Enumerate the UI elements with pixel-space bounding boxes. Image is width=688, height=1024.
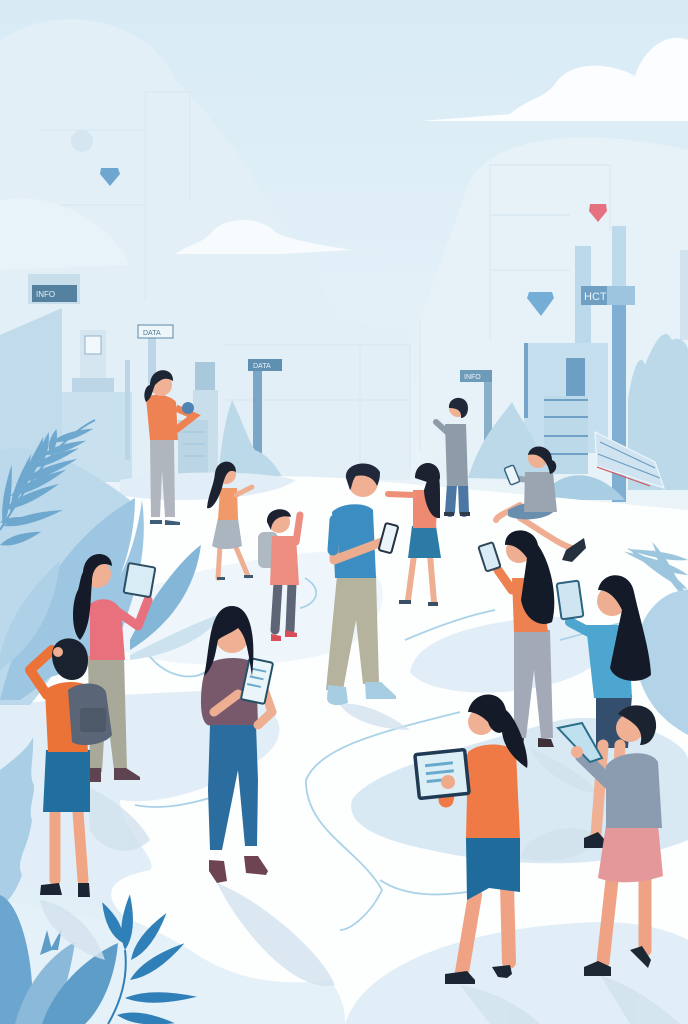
hazy background shapes — [0, 19, 688, 480]
left skyline: INFO — [36, 290, 55, 299]
ground pools — [0, 472, 688, 1024]
cloud: top right — [420, 38, 688, 121]
wire pile right — [595, 432, 664, 488]
lower left leaves — [0, 737, 34, 905]
person: woman in pink top with tablet — [73, 554, 155, 782]
faint circuit lines — [40, 92, 610, 470]
person shadows — [40, 704, 680, 1024]
sign posts: INFO — [464, 374, 481, 381]
person: boy seen from back — [436, 398, 470, 516]
sign posts: DATA — [253, 363, 271, 370]
person: woman in blue top with long hair — [557, 575, 651, 848]
left skyline — [0, 274, 173, 482]
person: boy with ponytail in orange shirt — [415, 694, 527, 984]
person: girl in teal skirt — [388, 463, 441, 606]
left skyline: DATA — [143, 330, 161, 337]
person: woman with ponytail, back left — [144, 370, 194, 525]
ground — [0, 476, 688, 1024]
mid bushes — [218, 400, 625, 500]
left palm — [0, 420, 95, 549]
cloud: middle — [175, 220, 352, 254]
person: child with backpack — [258, 509, 300, 641]
person: seated woman — [496, 446, 586, 562]
person: girl in grey skirt — [207, 462, 253, 580]
person: woman with pink skirt — [558, 705, 663, 976]
icon: gems — [71, 130, 607, 316]
left foliage mass — [0, 448, 225, 705]
far-right foliage — [628, 334, 688, 490]
background sky — [0, 0, 688, 520]
person: man in blue shirt — [326, 463, 398, 705]
right buildings — [524, 226, 688, 502]
person: boy with grey backpack — [30, 638, 112, 897]
person: central woman in purple top — [204, 606, 273, 883]
right buildings: HCT — [584, 291, 607, 303]
bottom left foliage — [0, 894, 197, 1024]
path lines — [135, 578, 640, 930]
right palm and leaves — [623, 540, 688, 735]
sign posts — [178, 359, 492, 478]
person: woman with long hair, orange top — [478, 530, 554, 748]
